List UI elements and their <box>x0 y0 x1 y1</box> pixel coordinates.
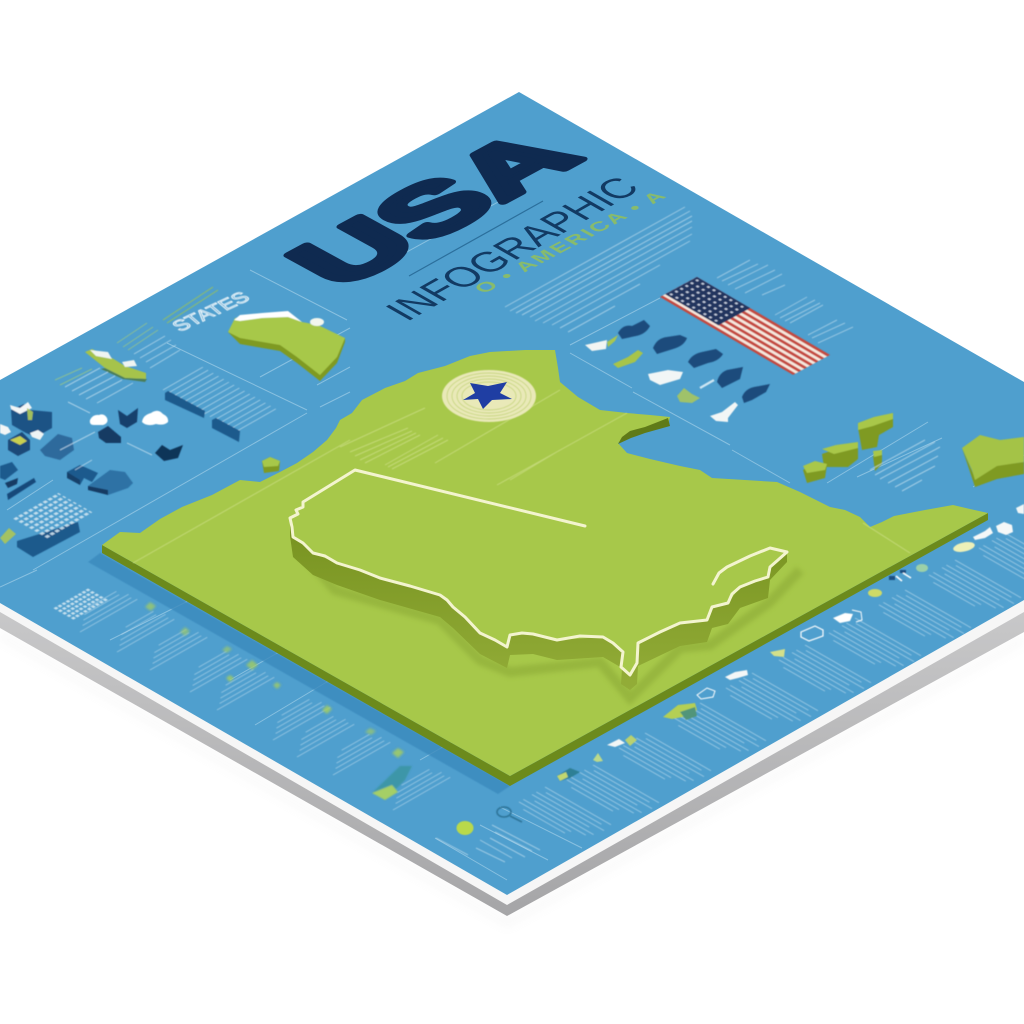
states heading <box>163 287 255 335</box>
islands: right cluster <box>803 413 893 483</box>
landmass top <box>962 435 1024 480</box>
subtitle rule <box>409 201 543 276</box>
lower-left text strip <box>63 589 450 810</box>
keyboard side icon <box>0 528 16 544</box>
block cluster 2 <box>8 430 44 456</box>
title block <box>265 117 673 327</box>
cloud 3 <box>0 424 11 435</box>
landmass thickness <box>102 513 988 786</box>
block connector lines <box>60 402 152 470</box>
icon: white flower <box>973 522 1013 540</box>
peninsula shadow <box>618 418 670 444</box>
icon: green leaf <box>593 753 603 762</box>
US flag <box>660 277 830 375</box>
block cluster 3 <box>40 434 74 460</box>
block cluster 8 <box>88 470 133 495</box>
lower-left green icons <box>145 602 404 758</box>
icon: outline box <box>801 626 823 641</box>
lower-left map icon <box>372 766 412 800</box>
bottom panel text <box>436 825 540 862</box>
landmark 4 <box>677 367 743 403</box>
outline stroke <box>290 470 787 675</box>
icon: teal ball <box>916 564 928 572</box>
board surface <box>0 92 1024 895</box>
outline shadow <box>300 550 800 698</box>
heading word: STATES <box>168 289 255 335</box>
panel divider lines <box>0 190 1024 880</box>
green landmass <box>102 350 988 786</box>
icon: dark marks <box>889 570 906 580</box>
icon: corner box <box>1016 504 1024 514</box>
keyboard keys <box>15 494 91 537</box>
icon: teal marker <box>557 768 580 781</box>
icon: white cloud <box>725 670 748 680</box>
star badge <box>442 370 536 422</box>
block cluster 1 <box>10 402 52 437</box>
cloud 2 <box>142 411 168 425</box>
landmark 5 <box>710 384 770 422</box>
left text grids <box>55 323 276 432</box>
island: Alaska shape <box>228 311 345 381</box>
icon: white and green <box>607 735 637 747</box>
cloud 1 <box>90 414 108 425</box>
flag side text lines <box>717 260 853 343</box>
right panel text lines <box>870 440 940 491</box>
landmass side <box>962 448 1024 487</box>
icon: yellow oval <box>868 589 882 597</box>
green circle icon <box>456 821 474 835</box>
strip island <box>85 349 147 382</box>
landmass top <box>102 350 988 776</box>
lower-left grid icon <box>55 589 107 619</box>
block cluster 9 <box>0 462 36 500</box>
fingerprint seal <box>442 370 536 422</box>
landmark 3 <box>648 349 723 385</box>
map shadow on the board <box>88 553 510 794</box>
green tagline: O • AMERICA • A <box>470 188 673 296</box>
lower-right text strip <box>515 533 1024 843</box>
icon: white hand <box>833 610 862 623</box>
landmark 2 <box>613 335 687 368</box>
block cluster 5 <box>118 408 138 428</box>
board shadow <box>0 632 1024 926</box>
flag stripes <box>660 277 830 375</box>
island chain top <box>803 413 893 473</box>
landmark icon row <box>585 320 770 422</box>
landmark 1 <box>585 320 650 351</box>
blue star <box>463 382 512 409</box>
flag stars <box>670 280 746 323</box>
island snow <box>234 311 302 322</box>
bar blocks <box>165 391 240 442</box>
block cluster 6 <box>155 445 183 461</box>
block cluster 7 <box>67 465 98 485</box>
heading accent lines <box>163 287 218 323</box>
magnifier icon <box>497 807 522 822</box>
subtitle: INFOGRAPHIC: INFOGRAPHIC <box>376 171 650 327</box>
island: right landmass <box>962 435 1024 487</box>
icon: outline <box>697 688 715 699</box>
left 3D block icons <box>0 402 183 500</box>
flag canton <box>665 277 750 325</box>
title: USA: USA <box>265 117 603 300</box>
icon: green map <box>663 703 697 720</box>
island side <box>228 332 345 381</box>
small island near west coast <box>262 457 280 473</box>
lines on the landmass <box>133 390 910 563</box>
board edge: grey side <box>0 602 1024 916</box>
details layer <box>0 207 1024 862</box>
island chain side <box>803 413 893 483</box>
intro text lines <box>505 207 692 332</box>
icon: green shape <box>770 649 785 657</box>
block cluster 4 <box>98 426 121 443</box>
outline raised wall <box>290 518 787 690</box>
board edge: white lip <box>0 600 1024 905</box>
icon: white dashes <box>896 573 911 581</box>
icon: cream oval <box>952 540 976 554</box>
lower-right icons <box>557 504 1024 781</box>
island top <box>228 312 345 375</box>
keyboard grid icon <box>0 494 91 557</box>
contiguous United States outline <box>290 470 800 698</box>
island snow patch <box>310 318 324 326</box>
keyboard base <box>17 522 80 557</box>
